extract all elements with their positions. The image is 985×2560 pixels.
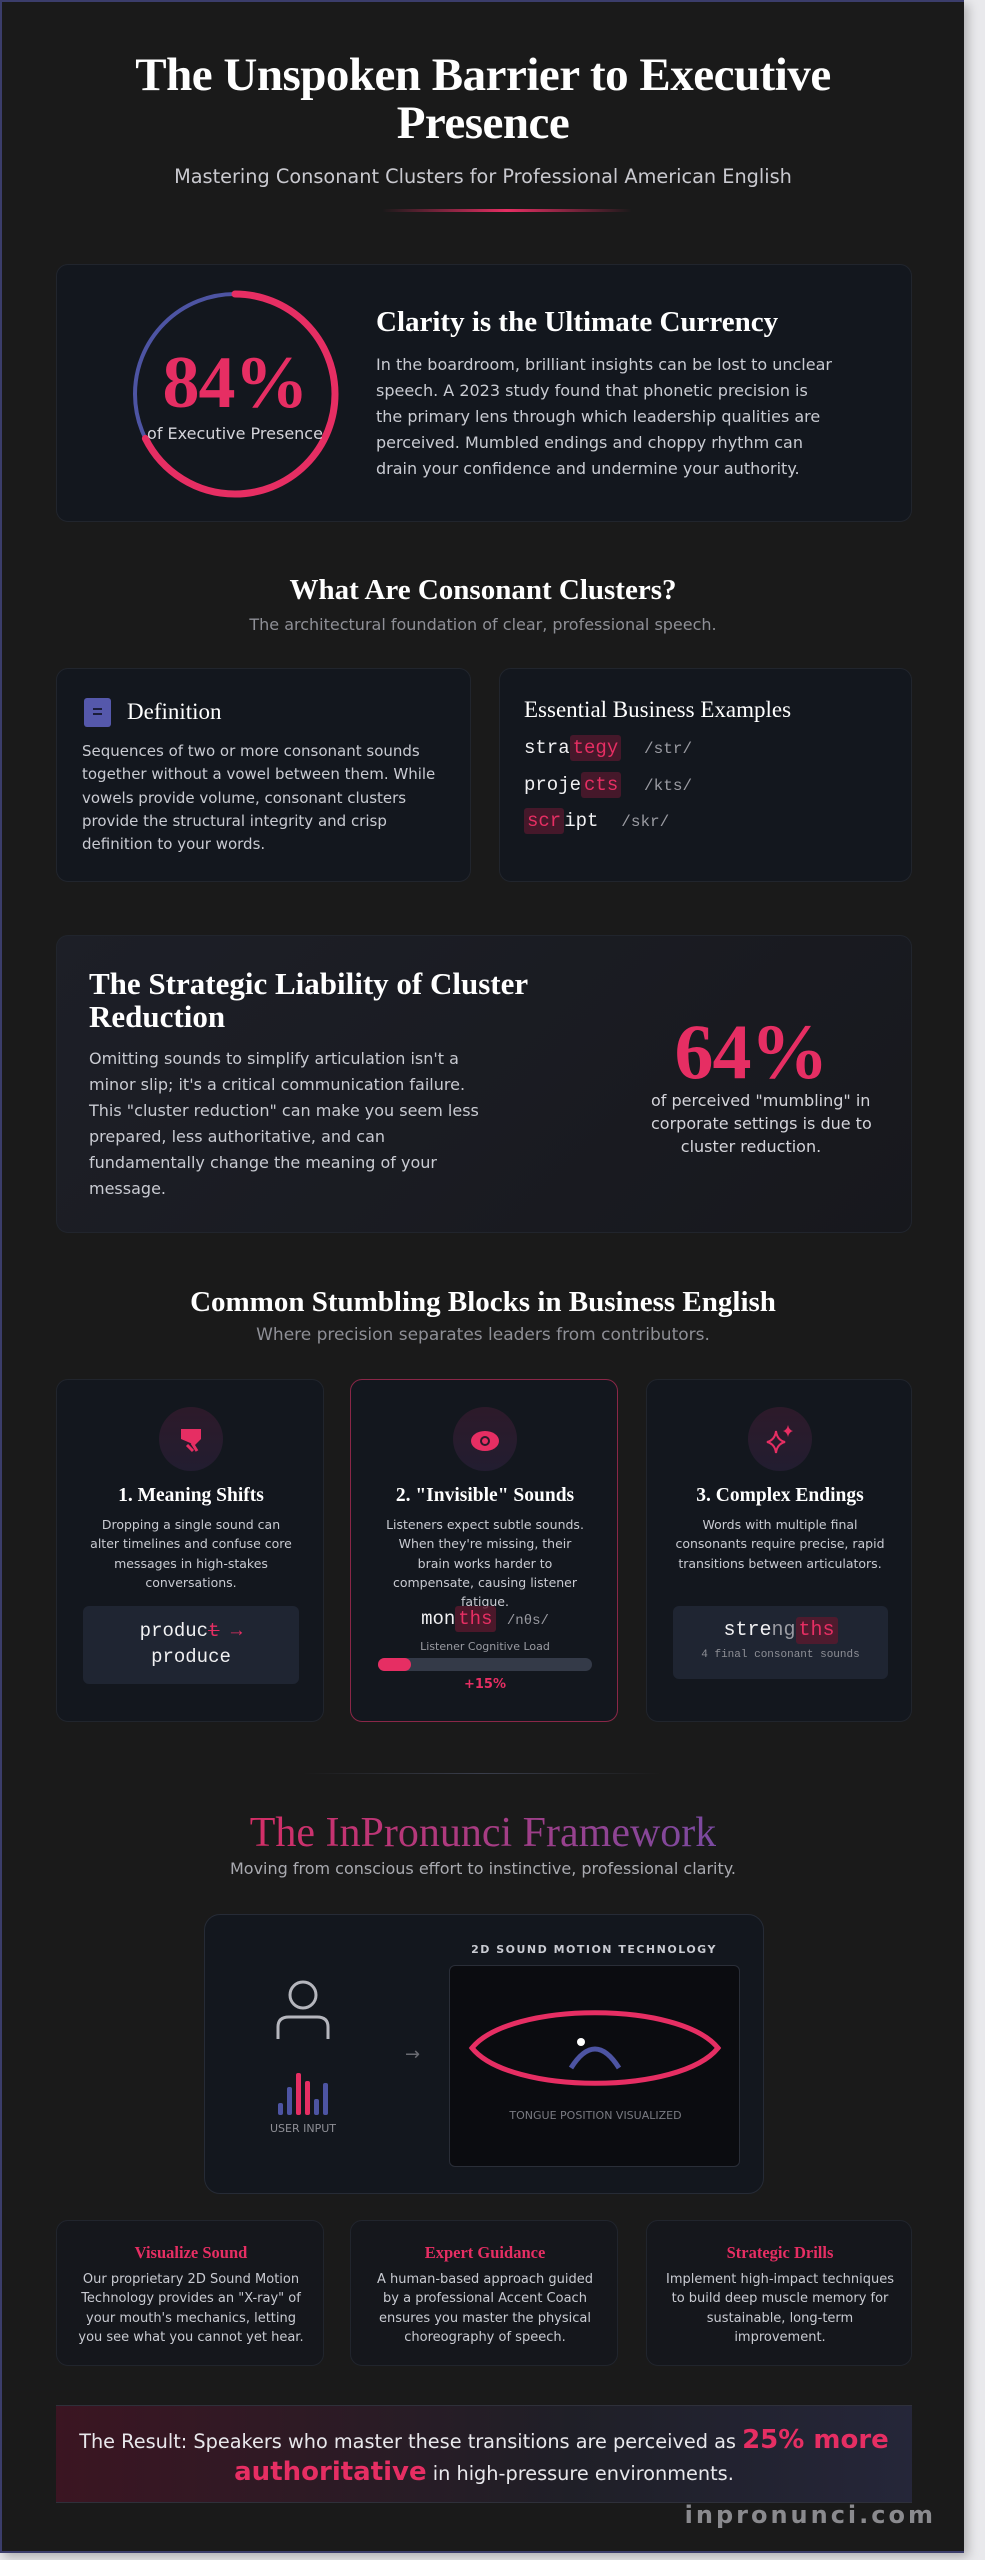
stat: 84%: 84% [162,342,308,424]
label: tech: 2D SOUND MOTION TECHNOLOGY [471,1943,717,1956]
card body: to build deep muscle memory for [672,2291,888,2306]
panel: expert guidance [350,2220,618,2366]
card body: brain works harder to [418,1556,552,1571]
panel: strategic drills [646,2220,912,2366]
panel: definition [56,668,471,882]
card body: Sequences of two or more consonant sounds [82,742,420,760]
card body: A human-based approach guided [377,2272,593,2287]
card body [386,1517,584,1609]
card title: Strategic Drills [727,2243,833,2262]
card body: conversations. [145,1575,237,1590]
bar chart: cognitive load [378,1658,592,1671]
title: Presence [397,97,569,149]
card heading: Essential Business Examples [524,697,791,722]
panel: visualize sound [56,2220,324,2366]
card heading: Definition [127,699,222,724]
callout: result banner: The Result: Speakers who master these transitions are perceived as 25% more [79,2425,889,2455]
chart: 84% ring [133,290,338,498]
heading: Clarity is the Ultimate Currency [376,306,778,338]
stat label: of Executive Presence [147,424,323,443]
card body: Listeners expect subtle sounds. [386,1517,584,1532]
subheading: The architectural foundation of clear, professional speech. [249,615,717,634]
card title: 3. Complex Endings [696,1485,864,1506]
stat: 64%: 64% [674,1008,828,1095]
heading [89,966,528,1034]
card body: improvement. [734,2330,826,2345]
card title: 2. "Invisible" Sounds [396,1485,574,1506]
stat caption: of perceived "mumbling" in [651,1091,870,1110]
example box: 4 final consonant sounds [701,1649,860,1661]
body text [88,1049,479,1198]
icon: flag [159,1407,223,1471]
panel: examples [499,668,912,882]
panel: sound motion tech [204,1914,764,2194]
body text: In the boardroom, brilliant insights can be lost to unclear [376,355,832,374]
card body: by a professional Accent Coach [383,2291,587,2306]
card body [666,2272,894,2345]
card body: alter timelines and confuse core [90,1536,292,1551]
bar label: Listener Cognitive Load [420,1640,550,1653]
example box: produce [151,1646,231,1668]
card body: consonants require precise, rapid [675,1536,885,1551]
card body: you see what you cannot yet hear. [78,2330,304,2345]
body text: the primary lens through which leadership qualities are [376,407,820,426]
body text: This "cluster reduction" can make you seem less [89,1101,479,1120]
card body: together without a vowel between them. While [82,765,435,783]
icon: user [276,1980,330,2039]
stat caption: cluster reduction. [681,1137,821,1156]
example rows [524,735,692,834]
card body [90,1517,292,1590]
example rows: projects /kts/ [524,774,692,796]
icon: audio bars [278,2073,328,2115]
card body: sustainable, long-term [707,2311,853,2326]
label: user input: USER INPUT [270,2122,336,2135]
card body: provide the structural integrity and crisp [82,812,387,830]
heading: The Strategic Liability of Cluster [89,966,528,1001]
panel: complex endings [646,1379,912,1722]
card body: ensures you master the physical [379,2311,591,2326]
title [135,49,831,149]
body text: Omitting sounds to simplify articulation isn't a [89,1049,459,1068]
icon: document [84,698,111,727]
card body: Words with multiple final [702,1517,858,1532]
subtitle: Mastering Consonant Clusters for Professional American English [174,165,792,188]
card body [675,1517,885,1571]
card title: 1. Meaning Shifts [118,1485,264,1506]
card body [82,742,435,853]
example box: strengths [723,1619,835,1642]
card body: choreography of speech. [404,2330,566,2345]
body text [376,355,832,478]
body text: drain your confidence and undermine your authority. [376,459,800,478]
card body: messages in high-stakes [114,1556,268,1571]
card body: When they're missing, their [399,1536,571,1551]
example box [673,1606,888,1679]
arrow: → [405,2044,420,2065]
stat: +15%: +15% [464,1677,506,1692]
card body: transitions between articulators. [678,1556,882,1571]
card body: Technology provides an "X-ray" of [81,2291,301,2306]
card body: Implement high-impact techniques [666,2272,894,2287]
stat caption: corporate settings is due to [651,1114,872,1133]
card title: Expert Guidance [425,2243,545,2262]
label: tongue position: TONGUE POSITION VISUALIZED [509,2109,682,2122]
icon: sparkles [748,1407,812,1471]
heading: framework: The InPronunci Framework [250,1810,716,1856]
callout: result banner: authoritative in high-pressure environments. [234,2457,734,2487]
callout: result banner [56,2405,912,2503]
example box: product → [140,1620,242,1642]
example rows: strategy /str/ [524,737,692,759]
example rows: script /skr/ [527,810,669,832]
example word: months /nθs/ [421,1608,549,1630]
stat caption [651,1091,872,1156]
icon: eye [453,1407,517,1471]
card body [377,2272,593,2345]
title: The Unspoken Barrier to Executive [135,49,831,101]
body text: perceived. Mumbled endings and choppy rhythm can [376,433,803,452]
card body: definition to your words. [82,835,265,853]
example box [83,1606,299,1684]
body text: minor slip; it's a critical communication failure. [89,1075,465,1094]
heading: Reduction [89,999,225,1034]
body text: speech. A 2023 study found that phonetic precision is [376,381,808,400]
body text: prepared, less authoritative, and can [89,1127,385,1146]
panel: meaning shifts [56,1379,324,1722]
body text: message. [89,1179,166,1198]
panel: clarity [56,264,912,522]
card body: compensate, causing listener [393,1575,577,1590]
panel: strategic liability [56,935,912,1233]
screen: tongue visualization [449,1965,740,2167]
card title: Visualize Sound [135,2243,247,2262]
card body: fatigue. [461,1594,509,1609]
heading: stumbling blocks: Common Stumbling Blocks in Business English [190,1286,776,1318]
card body: your mouth's mechanics, letting [86,2311,296,2326]
card body: vowels provide volume, consonant clusters [82,789,406,807]
footer: website: inpronunci.com [685,2501,936,2529]
card body: Our proprietary 2D Sound Motion [83,2272,299,2287]
card body: Dropping a single sound can [102,1517,280,1532]
panel: invisible sounds [350,1379,618,1722]
heading: what are consonant clusters: What Are Consonant Clusters? [290,574,676,606]
subheading: Moving from conscious effort to instinctive, professional clarity. [230,1859,736,1878]
body text: fundamentally change the meaning of your [89,1153,437,1172]
subheading: Where precision separates leaders from contributors. [256,1325,710,1345]
card body [78,2272,304,2345]
